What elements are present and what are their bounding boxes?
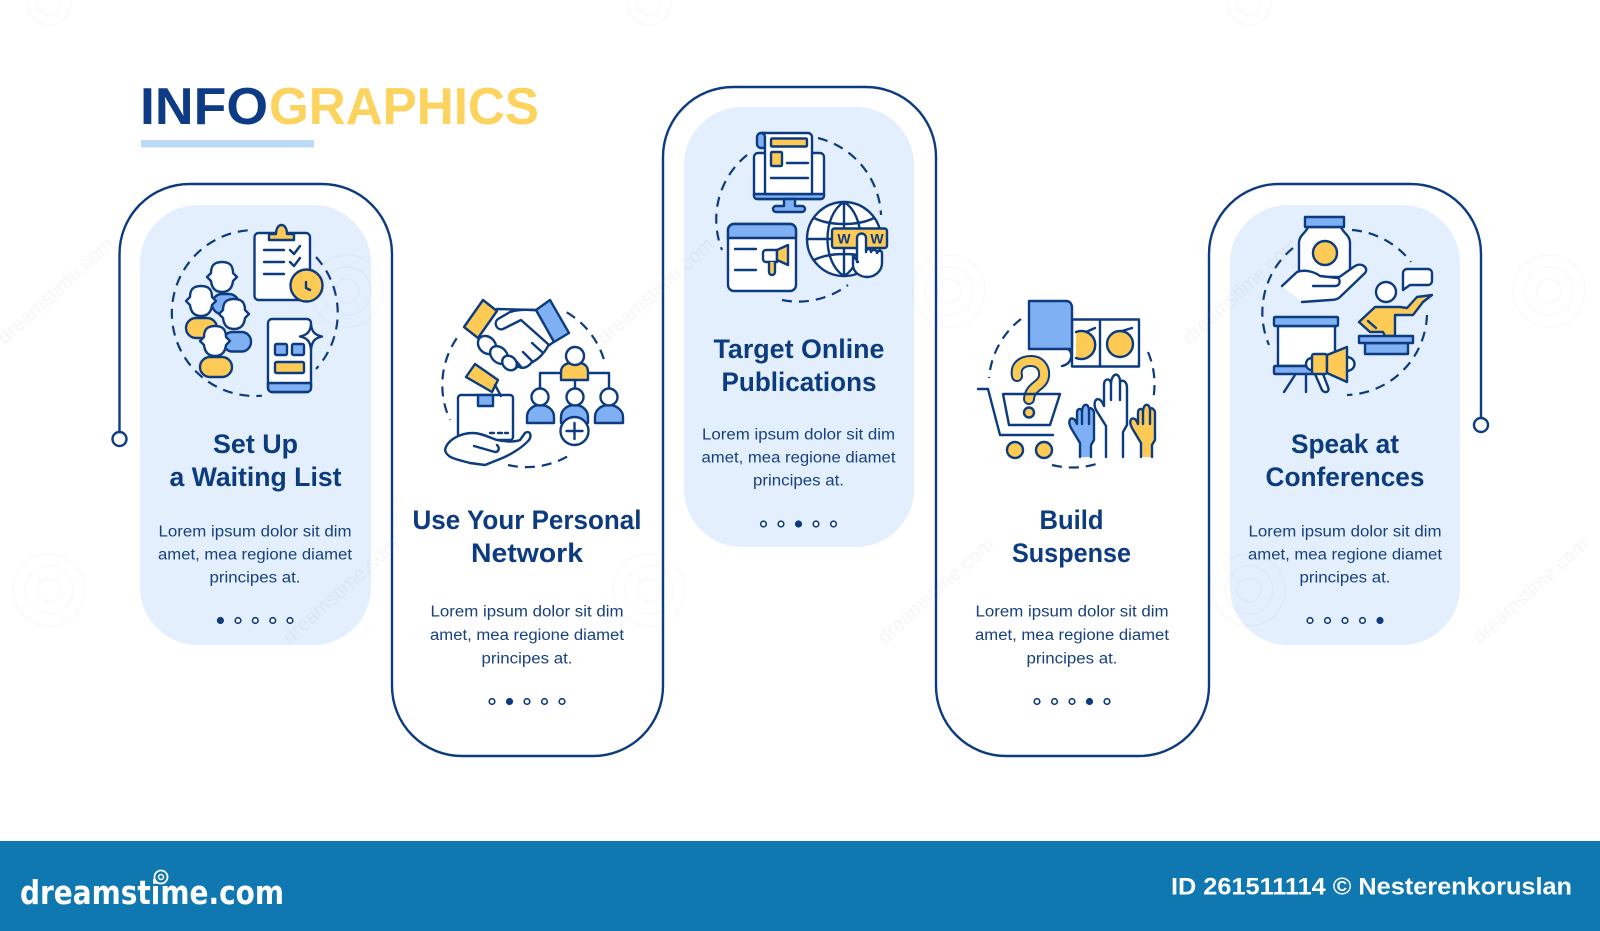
title: INFO — [140, 78, 268, 136]
pagination dots — [1034, 699, 1110, 704]
pagination dots — [761, 521, 836, 527]
body text — [975, 604, 1170, 668]
body text: principes at. — [1026, 650, 1118, 668]
body text: Lorem ipsum dolor sit dim — [158, 524, 352, 540]
body text: Lorem ipsum dolor sit dim — [702, 426, 895, 444]
body text: principes at. — [753, 472, 844, 490]
body text — [1248, 524, 1443, 586]
body text: principes at. — [482, 650, 572, 668]
body text: principes at. — [210, 570, 300, 586]
heading: Target Online — [714, 334, 884, 364]
panel: speak at conferences — [1248, 217, 1443, 623]
pagination dots — [489, 699, 565, 704]
footer banner — [0, 841, 1600, 931]
icon: waiting list — [172, 225, 338, 396]
watermark text: dreamstime.com — [279, 533, 403, 649]
heading: Suspense — [1012, 538, 1131, 568]
icon: personal network — [442, 300, 623, 467]
watermark text: dreamstime.com — [1469, 533, 1593, 649]
heading: Set Up — [213, 429, 298, 459]
logo: dreamstime.com — [20, 873, 284, 912]
heading: Use Your Personal — [412, 505, 642, 535]
heading — [170, 429, 342, 492]
panel: build suspense — [975, 301, 1170, 704]
heading: a Waiting List — [170, 462, 342, 492]
icon: conferences — [1262, 217, 1432, 395]
heading — [1266, 429, 1424, 492]
heading: Network — [471, 538, 584, 568]
image id and author: ID 261511114 © Nesterenkoruslan — [1171, 874, 1572, 900]
heading: Publications — [722, 367, 876, 397]
panel backgrounds — [140, 107, 1460, 645]
panel: use your personal network — [412, 300, 642, 704]
heading: Build — [1040, 505, 1104, 535]
body text: Lorem ipsum dolor sit dim — [1248, 524, 1442, 540]
pagination dots — [1307, 618, 1383, 623]
body text: Lorem ipsum dolor sit dim — [430, 604, 624, 620]
watermark text: dreamstime.com — [594, 233, 718, 349]
heading — [714, 334, 884, 397]
icon: online publications — [716, 133, 887, 302]
icon: online publications: W — [870, 230, 884, 246]
body text — [702, 426, 896, 490]
panel: target online publications — [702, 133, 896, 527]
title: GRAPHICS — [269, 78, 539, 136]
body text: amet, mea regione diamet — [1248, 546, 1443, 564]
heading — [1012, 505, 1131, 568]
watermark spirals — [13, 0, 1585, 626]
pagination dots — [218, 618, 293, 623]
body text: amet, mea regione diamet — [430, 627, 625, 644]
body text: amet, mea regione diamet — [158, 546, 353, 564]
body text: amet, mea regione diamet — [702, 450, 896, 466]
body text: amet, mea regione diamet — [975, 627, 1170, 644]
panel: set up a waiting list — [158, 225, 353, 623]
icon: online publications: W — [837, 230, 851, 246]
body text — [158, 524, 353, 586]
body text: Lorem ipsum dolor sit dim — [976, 604, 1168, 620]
watermark text: dreamstime.com — [1179, 233, 1303, 349]
heading — [412, 505, 642, 568]
body text: principes at. — [1300, 570, 1390, 586]
connected outline — [112, 87, 1488, 756]
heading: Conferences — [1266, 462, 1424, 492]
watermark text — [0, 233, 1593, 649]
title — [140, 78, 539, 148]
body text — [430, 604, 625, 668]
icon: suspense — [978, 301, 1155, 468]
watermark text: dreamstime.com — [874, 533, 998, 649]
heading: Speak at — [1291, 429, 1399, 459]
